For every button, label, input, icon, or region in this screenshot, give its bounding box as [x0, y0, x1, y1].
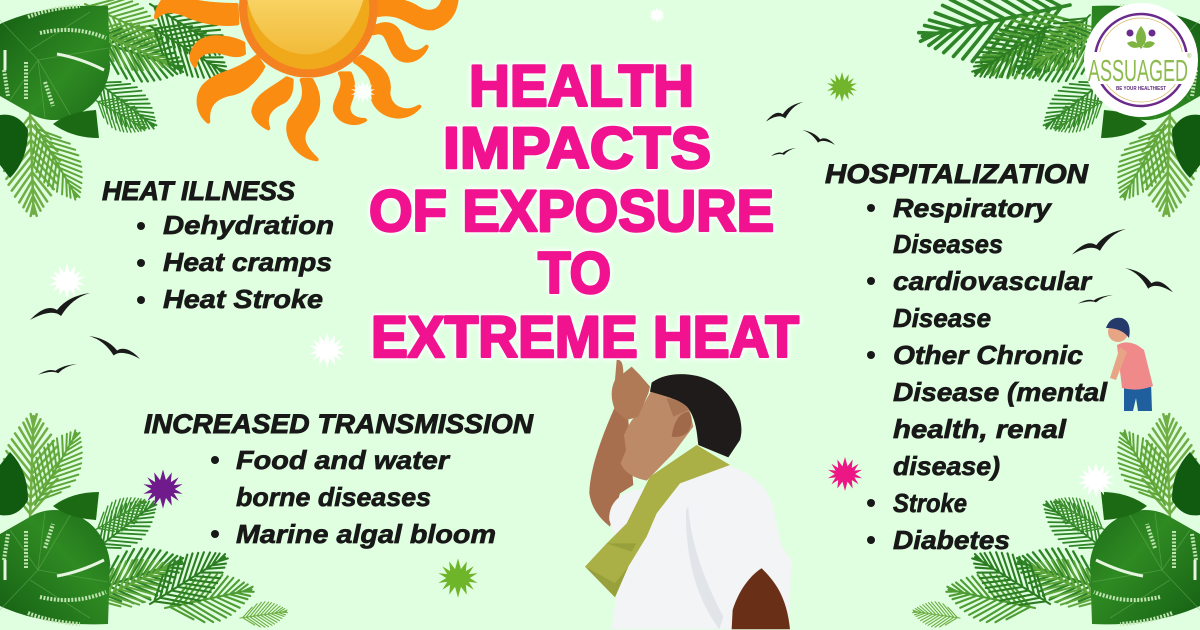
text block: heat illness: Dehydration [163, 210, 334, 240]
text block: hospitalization: Stroke [893, 488, 967, 518]
text block: hospitalization: Respiratory [893, 193, 1053, 223]
logo: Assuaged badge: BE YOUR HEALTHIEST [1116, 86, 1167, 92]
starburst: white near sun [351, 80, 375, 104]
foliage: top left [0, 0, 239, 217]
starburst: white middle [309, 332, 345, 368]
logo: Assuaged badge: ® [1187, 53, 1192, 60]
starburst: white right [1078, 462, 1114, 498]
title: EXTREME HEAT [371, 305, 799, 370]
starburst: white left [49, 263, 85, 299]
text block: increased transmission: borne diseases [236, 482, 431, 512]
text block: heat illness: Heat cramps [163, 247, 332, 277]
text block: hospitalization: Disease [893, 303, 991, 333]
birds: right flock [1072, 229, 1173, 304]
title: HEALTH [469, 54, 694, 119]
text block: increased transmission [144, 409, 534, 549]
starburst: green top [827, 72, 857, 102]
text block: hospitalization [825, 159, 1108, 555]
text block: heat illness: HEAT ILLNESS [102, 176, 295, 206]
foliage: bottom right [911, 413, 1200, 630]
text block: hospitalization: Diseases [893, 229, 1003, 259]
text block: hospitalization: cardiovascular [893, 266, 1093, 296]
birds: top flock [766, 102, 835, 156]
photo: man shielding eyes with towel [585, 360, 792, 629]
title: OF EXPOSURE [369, 179, 774, 244]
text block: heat illness [102, 176, 334, 314]
title: IMPACTS [443, 116, 711, 181]
text block: hospitalization: disease) [893, 451, 1000, 481]
text block: increased transmission: Marine algal bloom [236, 519, 496, 549]
title [369, 54, 799, 370]
starburst: purple [143, 469, 183, 509]
starburst: pink [828, 457, 862, 491]
birds: left flock [30, 293, 140, 375]
text block: hospitalization: HOSPITALIZATION [825, 159, 1089, 189]
foliage: top right [911, 0, 1200, 217]
text block: hospitalization: Other Chronic [893, 340, 1084, 370]
text block: increased transmission: Food and water [236, 445, 451, 475]
text block: heat illness: Heat Stroke [163, 284, 323, 314]
logo: Assuaged badge [1084, 3, 1198, 117]
text block: hospitalization: Diabetes [893, 525, 1010, 555]
icon: unwell woman [1106, 318, 1153, 411]
starburst: white top centre [649, 7, 665, 23]
text block: increased transmission: INCREASED TRANSMISSION [144, 409, 534, 439]
icon: sun [156, 0, 457, 159]
foliage: bottom left [0, 413, 289, 630]
starburst: green bottom [438, 558, 478, 598]
text block: hospitalization: Disease (mental [893, 377, 1108, 407]
text block: hospitalization: health, renal [893, 414, 1067, 444]
title: TO [538, 241, 611, 306]
